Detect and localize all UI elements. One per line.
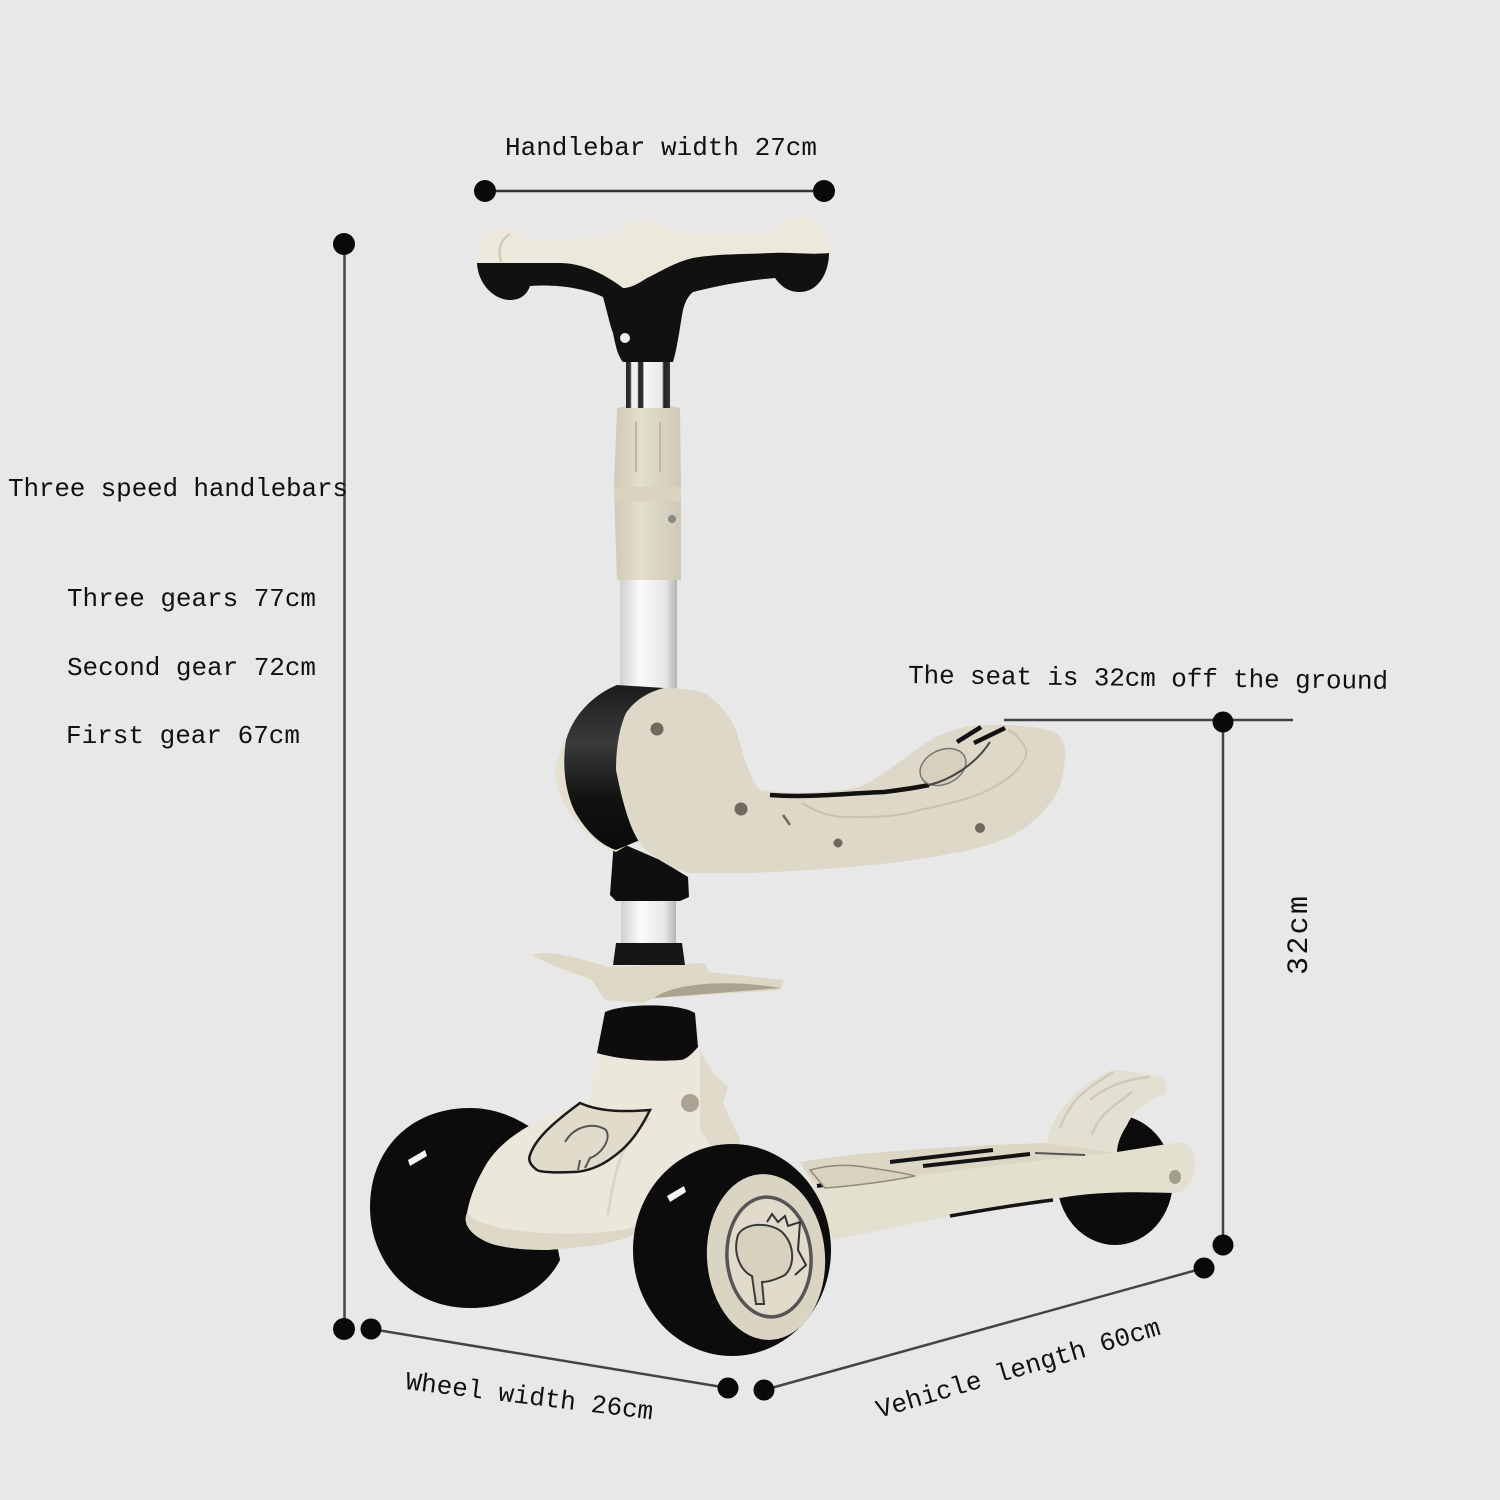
handlebar [477, 217, 829, 362]
left front wheel [370, 1108, 560, 1308]
rear wheel [1057, 1115, 1173, 1245]
upper aluminium pole [620, 575, 677, 695]
dimension: seat height: 32cm [1283, 896, 1317, 975]
lower chrome pole [621, 898, 676, 946]
lower black clamp [613, 943, 685, 965]
dimension: vehicle length: Vehicle length 60cm [873, 1313, 1164, 1426]
seat [555, 685, 1065, 873]
foot plate [532, 953, 784, 1003]
text block: handlebar heights: First gear 67cm [66, 721, 300, 751]
upper chrome pole [626, 360, 670, 408]
right front wheel [633, 1144, 831, 1356]
text block: handlebar heights: Second gear 72cm [67, 653, 316, 683]
text block: handlebar heights [8, 474, 348, 751]
dimension: handlebar width [474, 133, 835, 202]
dimension: overall height line [333, 233, 355, 1340]
dimension: wheel width: Wheel width 26cm [404, 1367, 655, 1427]
deck [800, 1142, 1195, 1240]
front housing [466, 1050, 740, 1250]
lower black collar [597, 1005, 698, 1061]
scooter illustration [370, 217, 1195, 1356]
text block: handlebar heights: Three speed handlebars [8, 474, 348, 504]
rear fender [1047, 1070, 1167, 1153]
dimension: wheel width [360, 1318, 738, 1427]
telescopic clamp [614, 405, 681, 580]
dimension: seat height [908, 661, 1388, 1256]
dimension: seat height: The seat is 32cm off the ground [908, 661, 1388, 697]
dimension: vehicle length [754, 1258, 1214, 1426]
dimension: handlebar width: Handlebar width 27cm [505, 133, 817, 163]
upper black joint [610, 840, 689, 901]
text block: handlebar heights: Three gears 77cm [67, 584, 316, 614]
